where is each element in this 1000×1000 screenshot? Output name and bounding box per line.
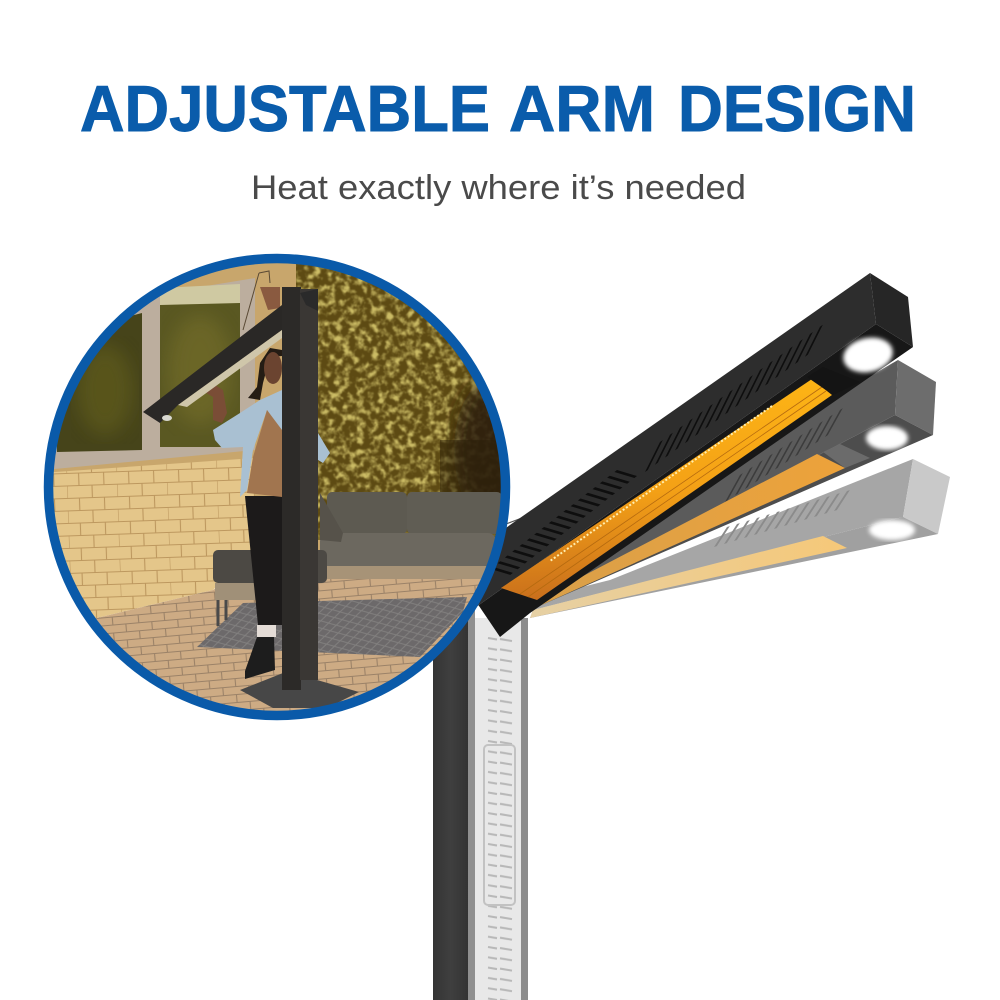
woman: [198, 271, 330, 679]
post bracket outline: [484, 745, 515, 905]
title: [80, 72, 916, 145]
product: top heater position: [470, 273, 913, 637]
photo: woman adjusting heater: [53, 263, 501, 711]
faded heater side face: [530, 459, 913, 610]
middle control panel: [823, 444, 870, 468]
denim jacket: [213, 390, 282, 497]
faded lamp: [869, 520, 915, 540]
boot: [245, 637, 275, 679]
brown sweater: [247, 410, 282, 497]
title: ADJUSTABLE: [80, 72, 490, 145]
middle lamp: [866, 426, 908, 450]
wall above window: [40, 250, 320, 550]
power cord: [506, 513, 535, 524]
product: middle heater position: [530, 360, 936, 610]
rug: [197, 597, 467, 657]
middle heating element: [537, 454, 845, 607]
product: heater post: [433, 610, 528, 1000]
top heating element: [501, 379, 832, 600]
top lamp: [840, 333, 896, 377]
patio pavers: [96, 579, 481, 711]
photo circle border: [48, 258, 506, 716]
window: [44, 278, 255, 470]
hand on post: [260, 287, 280, 310]
foliage background: [296, 264, 501, 540]
brick wall: [53, 458, 255, 618]
socks: [257, 625, 276, 637]
legs: [245, 496, 285, 625]
hair: [248, 348, 282, 400]
middle heater side face: [532, 360, 898, 605]
pull cord: [243, 271, 270, 330]
title: ARM: [509, 72, 655, 145]
subtitle: Heat exactly where it’s needed: [251, 169, 746, 207]
top control panel: [807, 367, 860, 395]
raised arm: [206, 386, 227, 423]
product: lowest heater position (faded): [530, 459, 950, 618]
top heater end cap: [870, 273, 913, 347]
outdoor sofa: [320, 492, 502, 579]
faded heating element: [530, 536, 847, 618]
adjustable arm in photo: [143, 305, 282, 423]
face: [264, 352, 282, 384]
title: DESIGN: [678, 72, 916, 145]
top heater side face with vents: [470, 273, 876, 607]
post and base in photo: [240, 287, 359, 708]
top heater underside: [476, 324, 913, 637]
ottoman: [213, 550, 327, 626]
